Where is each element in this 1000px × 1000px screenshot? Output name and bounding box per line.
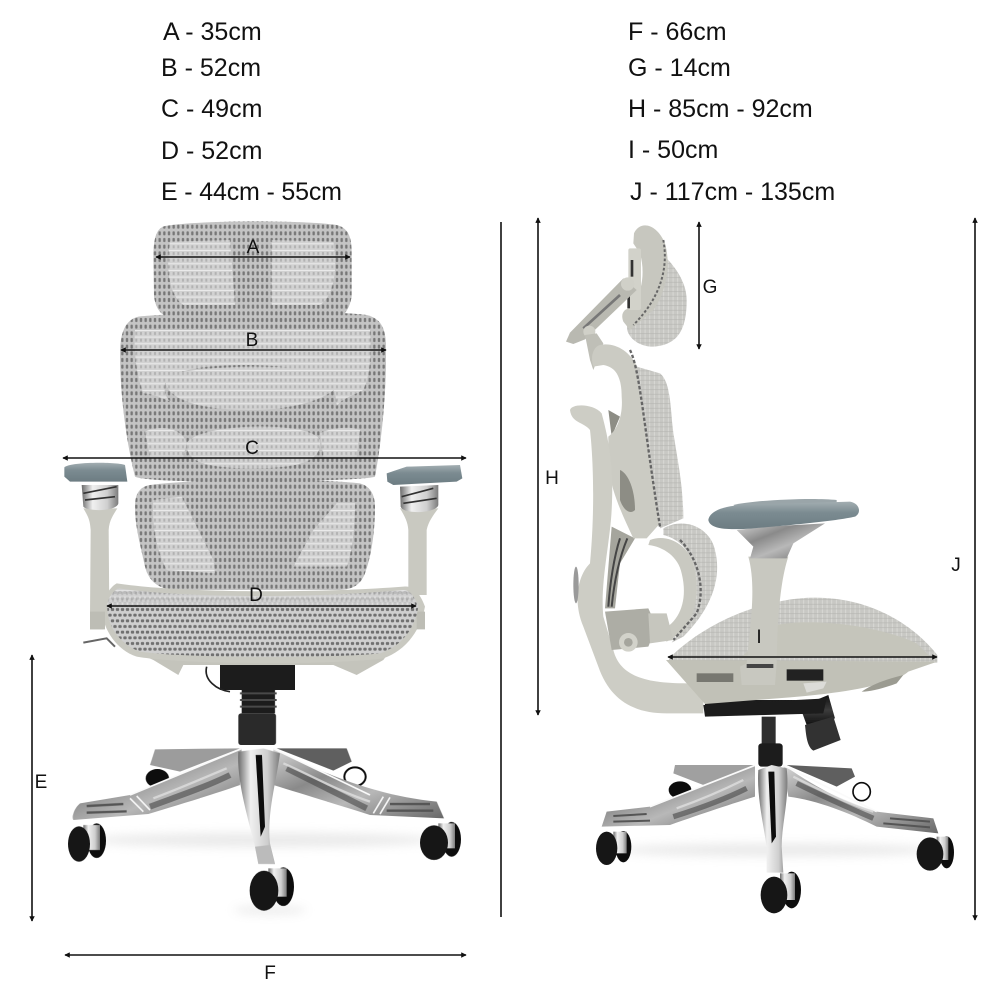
lumbar support bbox=[648, 523, 717, 643]
leg chrome streaks bbox=[87, 749, 433, 814]
dimension A: A - 35cm bbox=[163, 18, 262, 46]
arrow E: E bbox=[35, 772, 47, 793]
arrow J: J bbox=[951, 555, 961, 576]
seat lever bbox=[83, 638, 115, 647]
right leg bbox=[783, 765, 938, 833]
arrow A: A bbox=[247, 237, 260, 258]
leg chrome streaks bbox=[613, 765, 930, 827]
arm chrome joint bbox=[737, 523, 825, 558]
backrest lower mesh bbox=[135, 480, 375, 590]
right leg bbox=[273, 748, 444, 818]
arrow G: G bbox=[703, 277, 717, 298]
back legs bbox=[669, 765, 870, 801]
left armrest bbox=[64, 463, 127, 629]
arm pad bbox=[708, 499, 859, 529]
right armrest bbox=[387, 465, 462, 595]
dimension E: E - 44cm - 55cm bbox=[161, 178, 342, 206]
side view chair upper bbox=[566, 225, 937, 717]
panel: dimension list right column bbox=[628, 18, 835, 206]
arrow G bbox=[699, 222, 717, 349]
front leg bbox=[238, 748, 280, 864]
arrow F: F bbox=[264, 963, 276, 984]
dimension C: C - 49cm bbox=[161, 95, 262, 123]
dimension D: D - 52cm bbox=[161, 137, 262, 165]
seat mechanism bbox=[123, 647, 393, 692]
pivot connector bbox=[605, 608, 673, 652]
back frame bbox=[592, 344, 660, 538]
panel: dimension list left column bbox=[161, 18, 342, 206]
front leg bbox=[758, 765, 787, 873]
front view chair base bbox=[68, 680, 461, 915]
dimension F: F - 66cm bbox=[628, 18, 727, 46]
back mesh bbox=[637, 367, 683, 528]
column and tilt cylinder bbox=[705, 695, 841, 767]
arm post bbox=[740, 557, 788, 685]
dimension H: H - 85cm - 92cm bbox=[628, 95, 813, 123]
dimension B: B - 52cm bbox=[161, 54, 261, 82]
arrow C: C bbox=[245, 438, 259, 459]
divider bbox=[500, 222, 502, 917]
left leg bbox=[602, 765, 755, 827]
seat side bbox=[666, 598, 937, 717]
dimension J: J - 117cm - 135cm bbox=[630, 178, 835, 206]
backrest upper mesh bbox=[120, 312, 386, 482]
headrest side bbox=[566, 225, 687, 370]
arrow D: D bbox=[249, 585, 263, 606]
left leg bbox=[73, 748, 242, 820]
front view chair upper bbox=[64, 221, 462, 692]
headrest mesh bbox=[153, 221, 352, 318]
back legs bbox=[146, 748, 366, 788]
arrow H: H bbox=[545, 468, 559, 489]
dimension I: I - 50cm bbox=[628, 136, 718, 164]
back frame linkage bbox=[605, 410, 635, 608]
arrow I: I bbox=[756, 627, 762, 648]
rear spine bbox=[570, 405, 703, 713]
dimension G: G - 14cm bbox=[628, 54, 731, 82]
gas cylinder bbox=[238, 680, 277, 745]
side view chair base bbox=[596, 695, 954, 913]
arrow B: B bbox=[246, 330, 258, 351]
casters bbox=[68, 822, 461, 911]
casters bbox=[596, 831, 954, 913]
seat bbox=[90, 583, 425, 663]
